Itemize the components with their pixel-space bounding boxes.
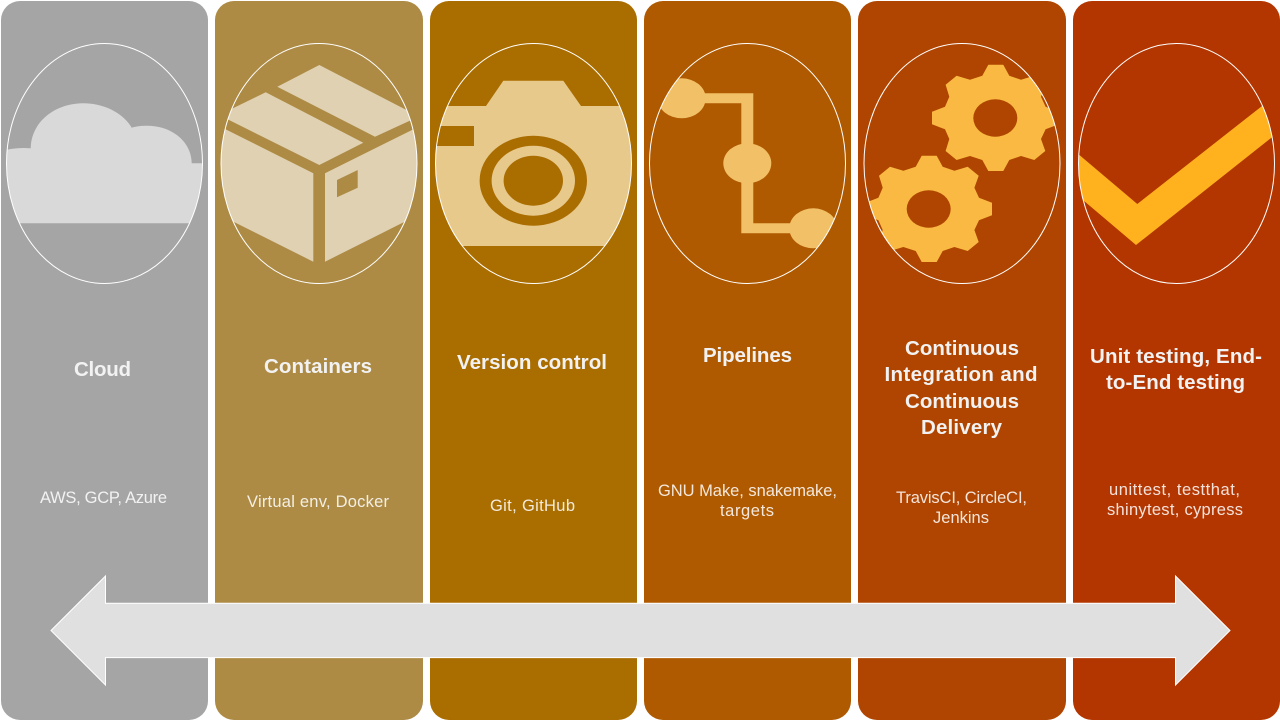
heading: testing: to-End testing xyxy=(1106,371,1245,394)
text: continuous integration tools xyxy=(896,489,1027,527)
containers icon ring xyxy=(221,44,417,284)
heading: version control: Version control xyxy=(457,351,607,374)
text: testing tools: unittest, testthat, xyxy=(1109,481,1240,499)
heading: cloud: Cloud xyxy=(74,358,131,381)
panel: continuous integration xyxy=(858,1,1066,720)
heading: continuous integration and delivery: Continuous xyxy=(905,337,1019,360)
heading: testing xyxy=(1090,345,1262,394)
heading: continuous integration and delivery xyxy=(884,337,1038,439)
text: testing tools: shinytest, cypress xyxy=(1107,501,1243,519)
text: continuous integration tools: TravisCI, CircleCI, xyxy=(896,489,1027,507)
icon: cloud xyxy=(0,103,210,223)
panel: pipelines xyxy=(644,1,851,720)
heading: continuous integration and delivery: Continuous xyxy=(905,390,1019,413)
testing panel background xyxy=(1073,1,1280,720)
icon: pipeline xyxy=(658,78,837,248)
heading: continuous integration and delivery: Integration and xyxy=(884,363,1038,386)
panel: version control xyxy=(430,1,640,720)
heading: testing: Unit testing, End- xyxy=(1090,345,1262,368)
panel: testing xyxy=(1070,1,1280,720)
containers panel background xyxy=(215,1,423,720)
panel: cloud xyxy=(0,1,210,720)
panel: containers xyxy=(215,1,425,720)
text: version control tools: Git, GitHub xyxy=(490,497,575,515)
version control panel background xyxy=(430,1,637,720)
text: container tools: Virtual env, Docker xyxy=(247,493,390,511)
text: continuous integration tools: Jenkins xyxy=(933,509,989,527)
cloud panel background xyxy=(1,1,208,720)
icon: check mark xyxy=(1079,106,1272,245)
version control icon ring xyxy=(436,44,632,284)
text: pipeline tools: targets xyxy=(720,502,774,520)
pipelines icon ring xyxy=(650,44,846,284)
arrow: double-headed spectrum xyxy=(51,576,1230,685)
continuous integration icon ring xyxy=(864,44,1060,284)
testing icon ring xyxy=(1078,44,1274,284)
pipelines panel background xyxy=(644,1,851,720)
icon: camera xyxy=(430,81,640,246)
cloud icon ring xyxy=(6,44,202,284)
icon: gears xyxy=(865,65,1059,262)
heading: continuous integration and delivery: Delivery xyxy=(921,416,1003,439)
text: testing tools xyxy=(1107,481,1243,519)
heading: pipelines: Pipelines xyxy=(703,344,792,367)
icon: box xyxy=(215,65,425,262)
text: pipeline tools xyxy=(658,482,837,520)
text: cloud tools: AWS, GCP, Azure xyxy=(40,489,167,507)
heading: containers: Containers xyxy=(264,355,372,378)
continuous integration panel background xyxy=(858,1,1066,720)
text: pipeline tools: GNU Make, snakemake, xyxy=(658,482,837,500)
